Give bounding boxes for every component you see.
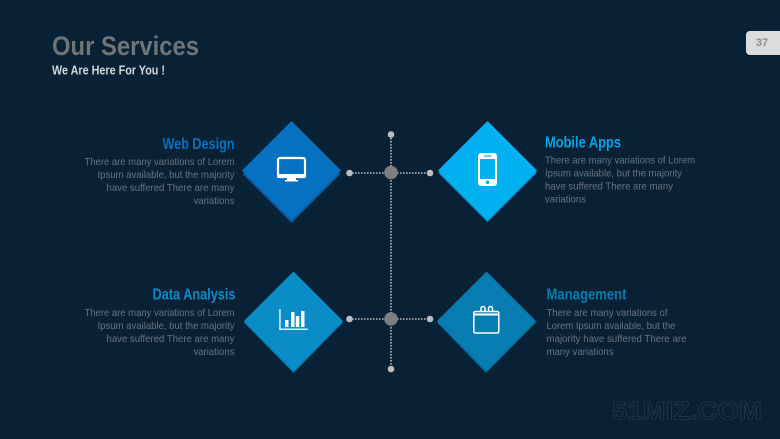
- heading: management: Management: [546, 286, 626, 304]
- heading: mobile apps: Mobile Apps: [545, 134, 621, 152]
- diamond: data analysis: [244, 272, 343, 373]
- text block: management: many variations: [546, 346, 614, 358]
- text block: management: Lorem Ipsum available, but the: [546, 320, 676, 332]
- page number tab: [746, 31, 780, 55]
- text block: mobile apps: [545, 154, 695, 206]
- icon: smartphone: [478, 153, 497, 186]
- title: Our Services: [52, 31, 199, 61]
- diamond: management: [437, 272, 536, 373]
- text block: management: majority have suffered There are: [546, 333, 687, 345]
- text block: management: There are many variations of: [546, 307, 668, 319]
- page number tab: 37: [756, 37, 768, 49]
- panel: management: [437, 272, 687, 373]
- text block: mobile apps: have suffered There are many: [545, 180, 674, 192]
- text block: mobile apps: Ipsum available, but the majority: [545, 168, 683, 180]
- heading: web design: Web Design: [162, 136, 234, 153]
- text block: data analysis: variations: [194, 346, 234, 358]
- text block: data analysis: Ipsum available, but the majority: [98, 320, 235, 332]
- text block: data analysis: [84, 307, 235, 358]
- text block: web design: variations: [194, 195, 234, 207]
- text block: mobile apps: variations: [545, 194, 586, 206]
- text block: web design: There are many variations of Lorem: [84, 156, 235, 168]
- text block: data analysis: There are many variations of Lorem: [84, 307, 235, 319]
- heading: data analysis: Data Analysis: [152, 286, 236, 304]
- panel: mobile apps: [438, 121, 695, 222]
- watermark: 51MIZ.COM: [612, 398, 762, 426]
- panel: web design: [84, 121, 341, 223]
- text block: web design: [84, 156, 235, 207]
- text block: web design: Ipsum available, but the majority: [98, 169, 235, 181]
- icon: calendar: [474, 306, 499, 333]
- text block: data analysis: have suffered There are many: [106, 333, 235, 345]
- icon: monitor: [277, 158, 306, 182]
- timeline connector: [346, 131, 433, 372]
- text block: web design: have suffered There are many: [106, 182, 235, 194]
- diamond: web design: [242, 121, 341, 223]
- panel: data analysis: [84, 272, 343, 373]
- text block: management: [546, 307, 687, 358]
- diamond: mobile apps: [438, 121, 537, 222]
- subtitle: We Are Here For You !: [52, 64, 165, 78]
- icon: bar chart: [279, 309, 308, 330]
- text block: mobile apps: There are many variations of Lorem: [545, 154, 695, 166]
